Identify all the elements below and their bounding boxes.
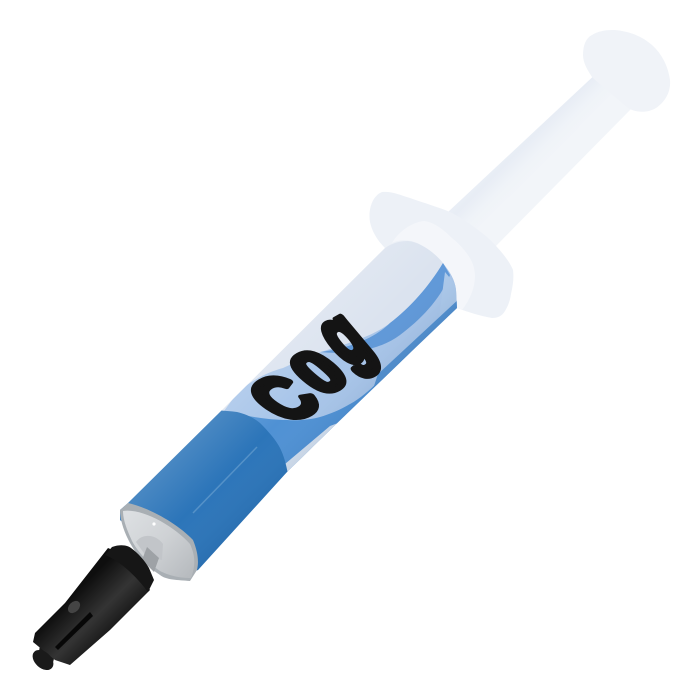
- dark blue band: [120, 410, 288, 570]
- black cap: [29, 545, 154, 674]
- cap collar: [105, 545, 154, 592]
- dish: [123, 511, 194, 578]
- nozzle cone: [136, 536, 163, 560]
- logo text: [228, 291, 388, 435]
- plunger head: [583, 30, 670, 112]
- cap bump: [66, 599, 82, 615]
- cylinder shading: [120, 368, 374, 521]
- mid blue wave: [249, 354, 410, 470]
- blue wave crest: [320, 263, 450, 353]
- cap slot: [55, 612, 93, 650]
- highlight: [152, 522, 156, 526]
- logo letter g: g: [296, 291, 388, 382]
- pale streak near flange: [442, 272, 457, 323]
- metal tube end: [120, 503, 198, 581]
- pale strip: [286, 424, 336, 471]
- flange: [370, 192, 513, 318]
- cap stem: [38, 645, 55, 666]
- pale label background: [131, 241, 448, 570]
- blue lower edge band: [373, 301, 457, 388]
- seam: [193, 447, 257, 513]
- rim: [120, 503, 198, 581]
- logo letter 0: 0: [273, 337, 365, 407]
- nozzle neck: [142, 547, 159, 572]
- cap tip: [29, 646, 57, 674]
- logo letter C: C: [228, 362, 339, 435]
- flange inner ring: [392, 221, 475, 310]
- plunger shaft: [448, 70, 635, 248]
- tube label: [120, 241, 457, 570]
- light blue wave: [224, 263, 457, 472]
- cap body: [33, 548, 150, 665]
